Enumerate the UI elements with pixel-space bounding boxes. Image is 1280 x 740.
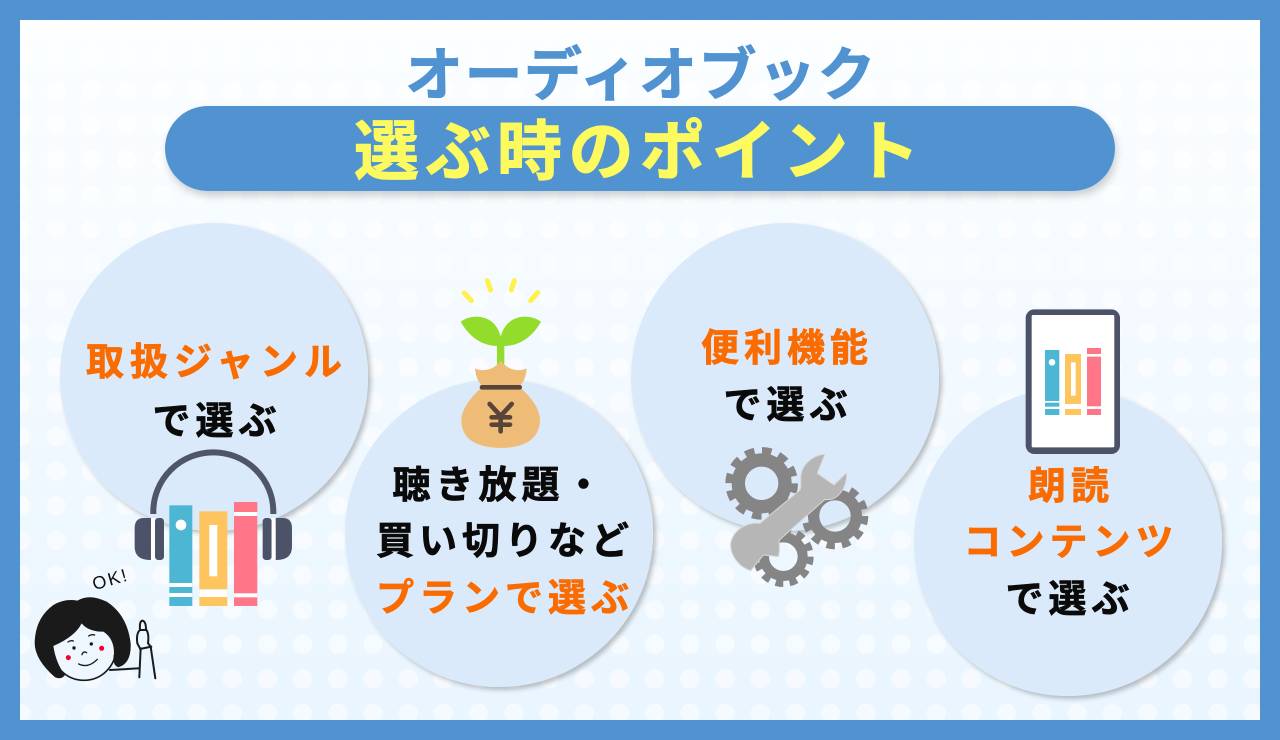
narration text: で選ぶ [1005,579,1135,621]
genre label: 取扱ジャンル [86,342,348,384]
panel: narration [914,388,1222,696]
face [52,616,116,680]
character: OK girl [35,565,155,680]
narration text: コンテンツ [963,522,1179,564]
narration text: 朗読 [1028,466,1114,508]
title: オーディオブック [405,43,877,108]
features text: で選ぶ [723,385,853,427]
plans text: 聴き放題・ [392,465,608,507]
heading banner [165,106,1115,191]
icon: gears and wrench [730,451,864,583]
hair [35,597,131,678]
icon: money bag with sprout [461,281,541,448]
plans text: プランで選ぶ [376,578,634,620]
plans text: 買い切りなど [376,521,634,563]
icon: headphones and books [135,452,292,606]
facial features [66,635,104,666]
panel: genre [60,223,368,531]
arm and thumb [110,621,155,678]
features text: 便利機能 [701,328,873,370]
panel: plans [345,379,653,687]
icon: tablet with books [1026,309,1120,454]
genre subtext: で選ぶ [152,401,282,443]
speech: OK: OK! [90,565,131,594]
narration text [963,466,1179,621]
features text [701,328,873,427]
heading banner: 選ぶ時のポイント [354,115,926,188]
plans text [376,465,634,620]
panel: features [631,223,939,531]
